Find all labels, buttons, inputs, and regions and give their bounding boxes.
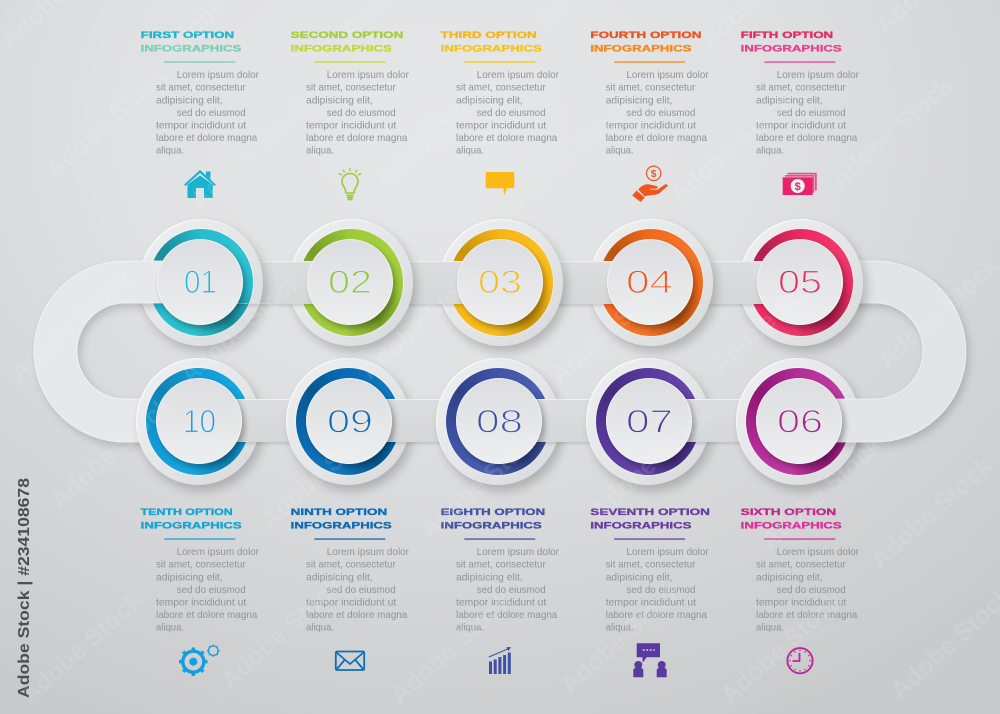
heading: third option: INFOGRAPHICS	[441, 44, 542, 55]
watermark: Adobe Stock	[45, 391, 178, 514]
text block: labore et dolore magna	[156, 132, 257, 144]
connector 08 to 07	[499, 399, 649, 442]
disc 02	[307, 239, 393, 325]
icon: speech bubble	[486, 172, 514, 196]
text block: tempor incididunt ut	[606, 596, 696, 608]
heading: eighth option	[441, 507, 545, 540]
watermark: Adobe Stock	[40, 61, 173, 184]
text block: labore et dolore magna	[306, 132, 407, 144]
number 10: 10	[183, 404, 216, 440]
watermark: Adobe Stock	[5, 264, 138, 387]
text block	[306, 546, 409, 634]
panel: seventh option	[590, 507, 710, 677]
text block: sed do eiusmod	[777, 107, 846, 119]
heading: sixth option: INFOGRAPHICS	[741, 521, 842, 532]
text block: aliqua.	[456, 145, 484, 157]
watermark: Adobe Stock	[865, 451, 998, 574]
connector 07 to 06	[649, 399, 799, 442]
watermark: Adobe Stock	[255, 411, 388, 534]
text block: aliqua.	[606, 145, 634, 157]
panel: ninth option	[291, 507, 409, 670]
panel: fourth option	[590, 30, 709, 202]
node base 01	[139, 218, 263, 346]
disc 01	[157, 239, 243, 325]
text block: sed do eiusmod	[177, 584, 246, 596]
number 05: 05	[778, 264, 822, 300]
heading: first option	[141, 30, 241, 63]
watermark: Adobe Stock	[505, 91, 638, 214]
number 01: 01	[184, 264, 217, 300]
text block	[456, 69, 559, 157]
heading: first option: FIRST OPTION	[141, 30, 234, 41]
text block: adipisicing elit,	[306, 571, 373, 583]
text block: labore et dolore magna	[756, 132, 857, 144]
text block	[606, 69, 709, 157]
text block: labore et dolore magna	[456, 609, 557, 621]
watermark: Adobe Stock	[585, 401, 718, 524]
heading: ninth option: INFOGRAPHICS	[291, 521, 392, 532]
connector 10 to 09	[199, 399, 349, 442]
text block: sed do eiusmod	[626, 107, 696, 119]
heading: tenth option	[141, 507, 242, 540]
icon: house	[184, 170, 216, 198]
text block: Lorem ipsum dolor	[477, 69, 559, 81]
node base 02	[289, 218, 413, 346]
text block: Lorem ipsum dolor	[626, 546, 709, 558]
watermark: Adobe Stock	[665, 86, 798, 209]
text block: labore et dolore magna	[606, 609, 707, 621]
heading: eighth option: INFOGRAPHICS	[441, 521, 542, 532]
disc 08	[456, 378, 542, 464]
watermark: Adobe Stock	[15, 586, 148, 709]
number 02: 02	[328, 264, 372, 300]
icon: two people talking	[633, 643, 667, 677]
text block: labore et dolore magna	[156, 609, 257, 621]
text block: sed do eiusmod	[477, 584, 546, 596]
text block: tempor incididunt ut	[306, 596, 396, 608]
panel: third option	[441, 30, 559, 196]
panel: sixth option	[741, 507, 859, 673]
text block: tempor incididunt ut	[156, 119, 246, 131]
heading: fifth option	[741, 30, 842, 63]
text block: adipisicing elit,	[756, 571, 823, 583]
text block: aliqua.	[606, 622, 634, 634]
icon: hand with coin	[632, 166, 668, 202]
connector 09 to 08	[349, 399, 499, 442]
heading: fourth option	[590, 30, 702, 63]
text block: sit amet, consectetur	[456, 559, 546, 571]
heading: sixth option: SIXTH OPTION	[741, 507, 836, 518]
watermark: Adobe Stock	[415, 421, 548, 544]
text block	[156, 69, 259, 157]
disc 10	[156, 378, 242, 464]
text block: sit amet, consectetur	[606, 82, 696, 94]
text block: Lorem ipsum dolor	[327, 69, 409, 81]
vertical stock caption: Adobe Stock | #234108678	[16, 478, 33, 698]
icon: banknotes: $	[795, 181, 801, 193]
watermark: Adobe Stock	[185, 91, 318, 214]
watermark: Adobe Stock	[755, 431, 888, 554]
heading: tenth option: TENTH OPTION	[141, 507, 233, 518]
watermark: Adobe Stock	[370, 71, 503, 194]
text block: sit amet, consectetur	[156, 82, 246, 94]
text block: Lorem ipsum dolor	[777, 69, 859, 81]
text block: adipisicing elit,	[456, 94, 523, 106]
number 03: 03	[478, 264, 522, 300]
connector 02 to 03	[350, 261, 500, 304]
number 09: 09	[327, 404, 373, 440]
text block: tempor incididunt ut	[756, 596, 846, 608]
heading: fifth option: FIFTH OPTION	[741, 30, 833, 41]
text block	[606, 546, 709, 634]
heading: seventh option	[590, 507, 710, 540]
text block: sed do eiusmod	[477, 107, 546, 119]
disc 07	[606, 378, 692, 464]
heading: tenth option: INFOGRAPHICS	[141, 521, 242, 532]
heading: sixth option	[741, 507, 842, 540]
right curved connector	[834, 260, 972, 450]
watermark: Adobe Stock	[825, 71, 958, 194]
text block: aliqua.	[306, 145, 334, 157]
panel: eighth option	[441, 507, 559, 674]
text block: Lorem ipsum dolor	[626, 69, 709, 81]
text block: adipisicing elit,	[606, 571, 672, 583]
heading: third option: THIRD OPTION	[441, 30, 537, 41]
node base 01 right half overlap	[237, 260, 271, 304]
number 06: 06	[777, 404, 823, 440]
text block: sed do eiusmod	[777, 584, 846, 596]
text block: tempor incididunt ut	[606, 119, 696, 131]
text block: Lorem ipsum dolor	[477, 546, 559, 558]
number 08: 08	[476, 404, 523, 440]
text block: sit amet, consectetur	[456, 82, 546, 94]
heading: ninth option	[291, 507, 392, 540]
text block: tempor incididunt ut	[456, 119, 546, 131]
text block: tempor incididunt ut	[456, 596, 546, 608]
watermark: Adobe Stock	[715, 586, 848, 709]
text block: adipisicing elit,	[306, 94, 373, 106]
text block	[756, 69, 859, 157]
text block: aliqua.	[306, 622, 334, 634]
text block: labore et dolore magna	[606, 132, 707, 144]
disc 09	[306, 378, 392, 464]
text block: aliqua.	[756, 145, 784, 157]
text block: sed do eiusmod	[626, 584, 696, 596]
heading: second option: SECOND OPTION	[291, 30, 403, 41]
text block: tempor incididunt ut	[306, 119, 396, 131]
number 04: 04	[626, 264, 673, 300]
text block: sit amet, consectetur	[606, 559, 696, 571]
watermark: Adobe Stock	[355, 261, 488, 384]
text block: tempor incididunt ut	[156, 596, 246, 608]
icon: growth chart	[488, 647, 511, 674]
node base 10	[136, 358, 260, 484]
heading: ninth option: NINTH OPTION	[291, 507, 387, 518]
text block: tempor incididunt ut	[756, 119, 846, 131]
icon: clock	[787, 648, 813, 673]
node base 04	[589, 218, 713, 346]
text block: adipisicing elit,	[156, 571, 223, 583]
panel: fifth option	[741, 30, 859, 195]
text block: Lorem ipsum dolor	[327, 546, 409, 558]
icon: light bulb	[339, 168, 361, 200]
node base 09	[286, 358, 410, 484]
connector 04 to 05	[650, 261, 800, 304]
icon: banknotes	[783, 173, 817, 195]
text block: sed do eiusmod	[177, 107, 246, 119]
watermark: Adobe Stock	[555, 576, 688, 699]
node base 03	[439, 218, 563, 346]
heading: seventh option: SEVENTH OPTION	[590, 507, 710, 518]
panel: tenth option	[141, 507, 259, 676]
text block	[156, 546, 259, 634]
heading: eighth option: EIGHTH OPTION	[441, 507, 545, 518]
text block: Lorem ipsum dolor	[177, 69, 259, 81]
text block	[756, 546, 859, 634]
text block: Lorem ipsum dolor	[777, 546, 859, 558]
text block: sit amet, consectetur	[306, 82, 396, 94]
text block: aliqua.	[756, 622, 784, 634]
text block: adipisicing elit,	[756, 94, 823, 106]
node base 07	[586, 358, 710, 484]
node base 05	[739, 218, 863, 346]
panel: second option	[291, 30, 409, 200]
text block: sed do eiusmod	[327, 107, 396, 119]
icon: hand with coin: $	[651, 169, 657, 180]
watermark: Adobe Stock	[175, 266, 308, 389]
heading: second option: INFOGRAPHICS	[291, 44, 392, 55]
heading: third option	[441, 30, 542, 63]
text block	[456, 546, 559, 634]
disc 03	[457, 239, 543, 325]
text block: sit amet, consectetur	[756, 559, 846, 571]
node base 08	[436, 358, 560, 484]
heading: seventh option: INFOGRAPHICS	[590, 521, 691, 532]
heading: second option	[291, 30, 403, 63]
heading: first option: INFOGRAPHICS	[141, 44, 241, 55]
text block: sit amet, consectetur	[156, 559, 246, 571]
disc 04	[607, 239, 693, 325]
text block: aliqua.	[156, 145, 184, 157]
watermark: Adobe Stock	[215, 571, 348, 694]
connector 01 to 02	[200, 261, 350, 304]
watermark: Adobe Stock	[385, 586, 518, 709]
text block: labore et dolore magna	[756, 609, 857, 621]
panel: first option	[141, 30, 259, 198]
heading: fourth option: INFOGRAPHICS	[590, 44, 691, 55]
text block: adipisicing elit,	[606, 94, 672, 106]
icon: gears	[179, 644, 220, 676]
icon: envelope	[336, 652, 364, 670]
text block: aliqua.	[456, 622, 484, 634]
text block: Lorem ipsum dolor	[177, 546, 259, 558]
number 07: 07	[626, 404, 673, 440]
text block: adipisicing elit,	[156, 94, 223, 106]
text block: labore et dolore magna	[306, 609, 407, 621]
heading: fourth option: FOURTH OPTION	[590, 30, 702, 41]
text block: aliqua.	[156, 622, 184, 634]
connector 03 to 04	[500, 261, 650, 304]
text block: sed do eiusmod	[327, 584, 396, 596]
text block	[306, 69, 409, 157]
text block: adipisicing elit,	[456, 571, 523, 583]
watermark: Adobe Stock	[705, 256, 838, 379]
disc 06	[756, 378, 842, 464]
text block: labore et dolore magna	[456, 132, 557, 144]
left curved connector	[34, 260, 166, 449]
node base 06	[736, 358, 860, 484]
text block: sit amet, consectetur	[756, 82, 846, 94]
disc 05	[757, 239, 843, 325]
heading: fifth option: INFOGRAPHICS	[741, 44, 842, 55]
text block: sit amet, consectetur	[306, 559, 396, 571]
watermark: Adobe Stock	[545, 266, 678, 389]
